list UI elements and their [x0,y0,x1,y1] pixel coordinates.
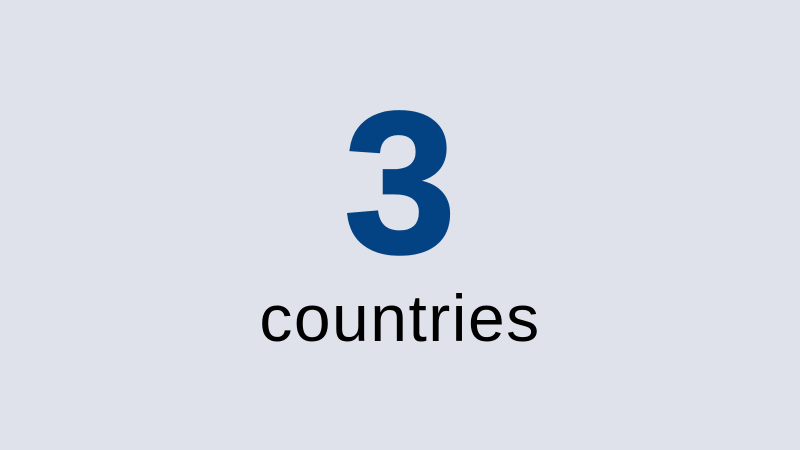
big number: 3 [344,70,456,295]
label: countries: countries [259,281,541,355]
